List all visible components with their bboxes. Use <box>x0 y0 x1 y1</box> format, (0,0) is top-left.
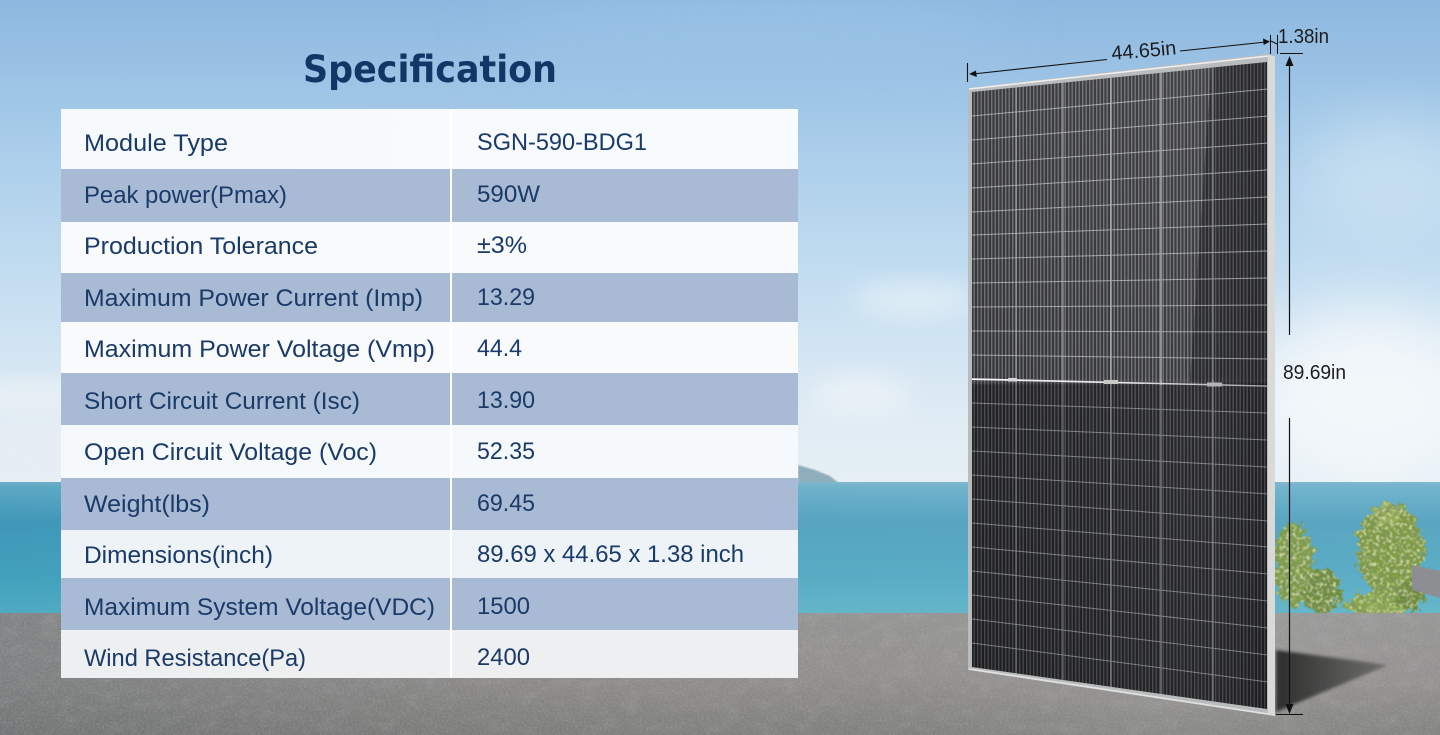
row: maximum power current: 13.29 <box>477 284 535 311</box>
solar panel <box>968 40 1275 720</box>
row: production tolerance: Production Tolerance <box>84 233 318 260</box>
title: Specification <box>303 48 557 91</box>
row: peak power: Peak power(Pmax) <box>84 182 287 209</box>
row: wind resistance: 2400 <box>477 644 530 671</box>
row: open circuit voltage: Open Circuit Voltage (Voc) <box>84 439 377 466</box>
row: maximum system voltage: 1500 <box>477 593 530 620</box>
row: short circuit current: Short Circuit Current (Isc) <box>84 388 360 415</box>
row: weight: Weight(lbs) <box>84 491 210 518</box>
specification table <box>61 109 798 678</box>
row: maximum power current: Maximum Power Current (Imp) <box>84 285 423 312</box>
row: production tolerance <box>84 232 527 260</box>
row: open circuit voltage: 52.35 <box>477 438 535 465</box>
row: peak power: 590W <box>477 181 540 208</box>
row: weight: 69.45 <box>477 490 535 517</box>
row: wind resistance <box>84 644 530 672</box>
row: maximum power voltage: 44.4 <box>477 335 522 362</box>
row: wind resistance: Wind Resistance(Pa) <box>84 645 306 672</box>
table row backgrounds <box>61 109 798 678</box>
row: module type: SGN-590-BDG1 <box>477 129 647 156</box>
row: module type <box>84 129 647 157</box>
row: dimensions <box>84 541 744 569</box>
panel shadow on ground <box>1276 650 1388 712</box>
panel frame <box>968 54 1275 716</box>
row: short circuit current <box>84 387 535 415</box>
rooftop structure <box>1412 565 1440 598</box>
row: open circuit voltage <box>84 438 535 466</box>
dimension: height 89.69in: 89.69in <box>1283 362 1346 384</box>
trees <box>1274 503 1424 619</box>
cell grid lines: lower half <box>972 380 1268 710</box>
row: maximum power voltage: Maximum Power Voltage (Vmp) <box>84 336 435 363</box>
row: dimensions: Dimensions(inch) <box>84 542 273 569</box>
dimension: width 44.65in <box>968 37 1270 82</box>
centre junction bar <box>972 378 1268 387</box>
row: weight <box>84 490 535 518</box>
dimension: height 89.69in <box>1276 54 1346 714</box>
island <box>798 465 840 486</box>
row: production tolerance: ±3% <box>477 232 527 259</box>
dimension: depth 1.38in: 1.38in <box>1278 26 1329 48</box>
row: module type: Module Type <box>84 130 228 157</box>
row: short circuit current: 13.90 <box>477 387 535 414</box>
dimension: width 44.65in: 44.65in <box>1111 37 1177 65</box>
row: peak power <box>84 181 540 209</box>
cell grid lines: upper half <box>972 60 1268 386</box>
dimension: depth 1.38in <box>1270 26 1329 54</box>
solar cells <box>972 40 1268 720</box>
row: maximum system voltage: Maximum System Voltage(VDC) <box>84 594 435 621</box>
row: dimensions: 89.69 x 44.65 x 1.38 inch <box>477 541 744 568</box>
